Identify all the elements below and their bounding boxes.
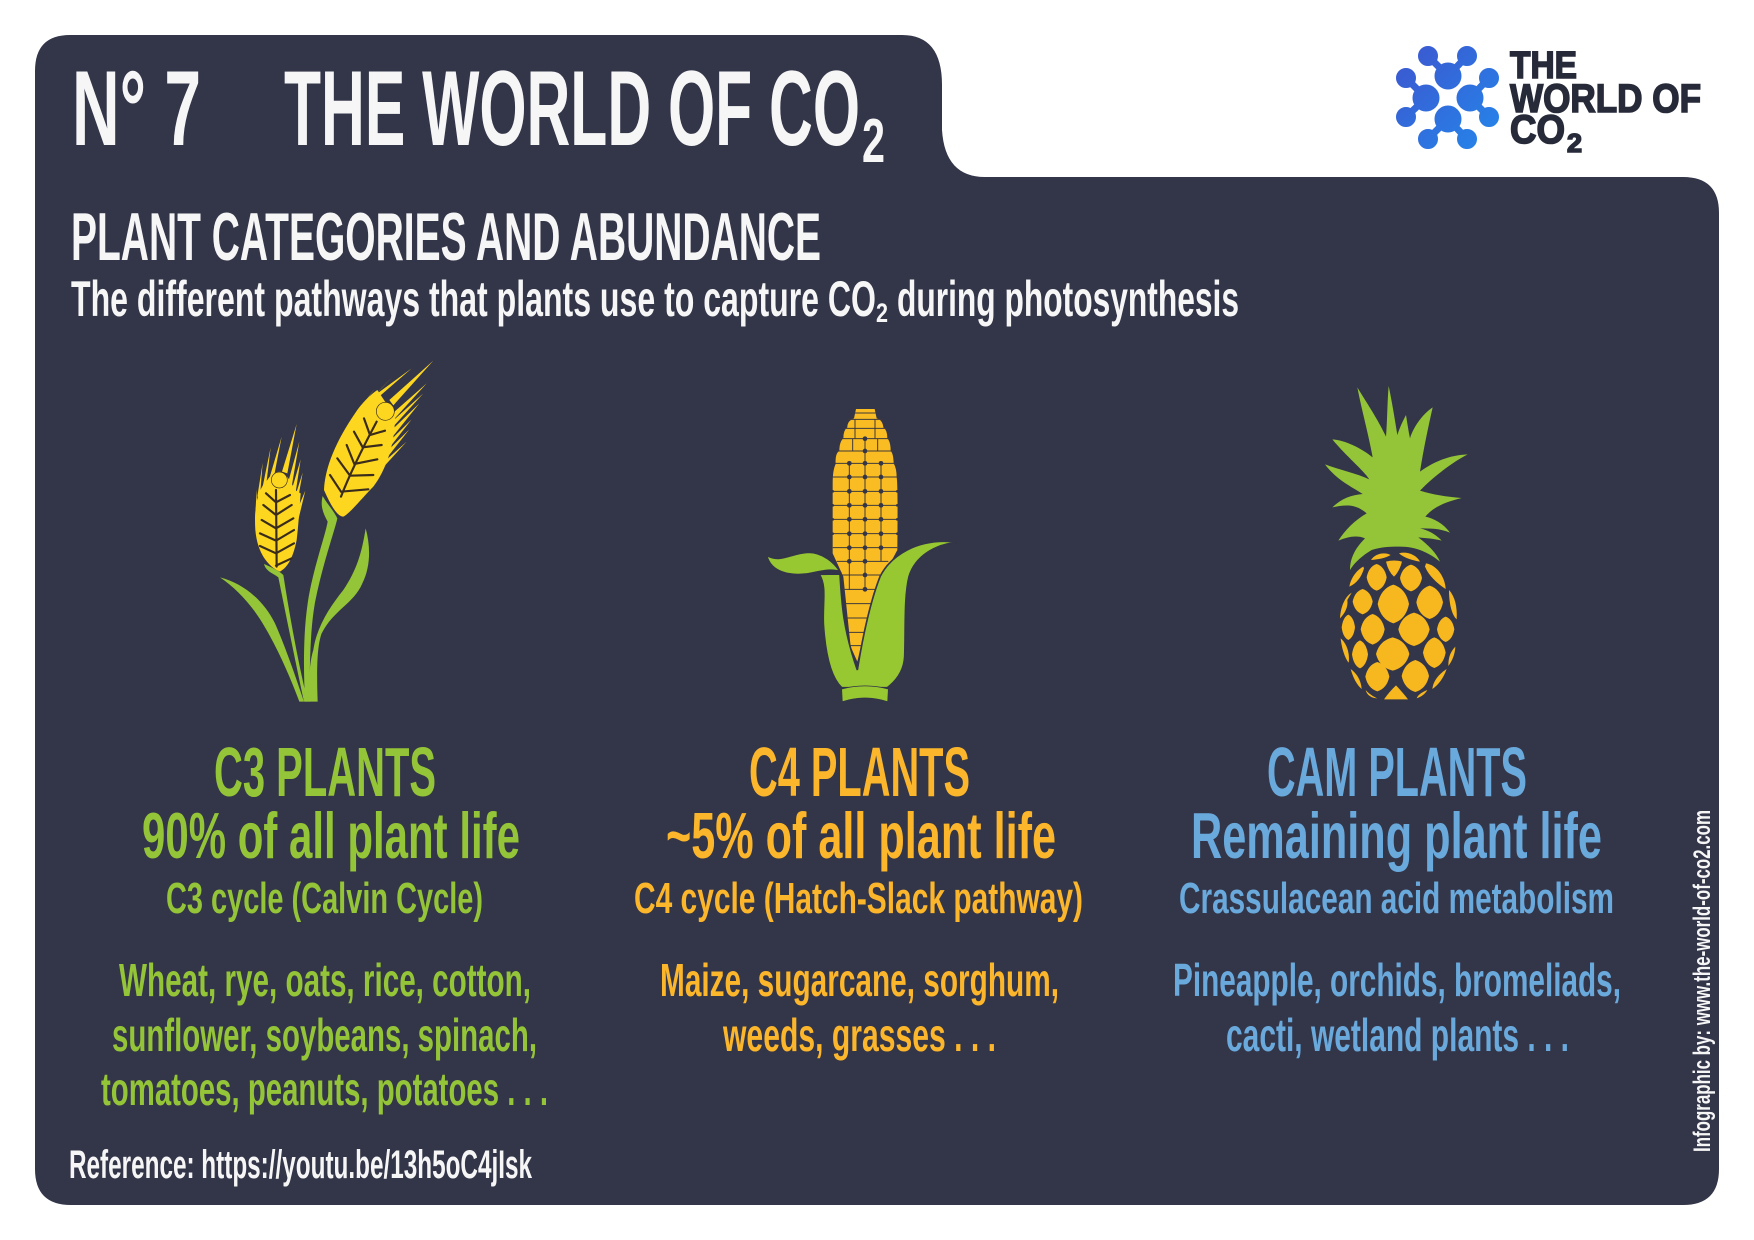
CAM examples: cacti, wetland plants . . .: [1226, 1009, 1569, 1061]
logo wordmark: CO: [1510, 108, 1565, 152]
heading: plant categories: PLANT CATEGORIES AND ABUNDANCE: [71, 199, 821, 275]
C3 examples: Wheat, rye, oats, rice, cotton,: [119, 954, 531, 1006]
title: THE WORLD OF CO: [284, 48, 860, 168]
CAM examples: [1173, 954, 1621, 1061]
icon: wheat: [220, 361, 433, 702]
panel: C3 plants: [101, 361, 548, 1115]
subtitle: 2: [876, 298, 888, 328]
panel: CAM plants: [1173, 386, 1621, 1061]
C3 title: C3 PLANTS: [214, 733, 436, 811]
logo: [1398, 45, 1701, 158]
panel: C4 plants: [634, 409, 1083, 1061]
logo wordmark: WORLD OF: [1510, 77, 1701, 121]
CAM title: CAM PLANTS: [1267, 733, 1527, 811]
logo wordmark: 2: [1567, 128, 1582, 158]
icon: maize cob: [767, 409, 958, 702]
title: N° 7: [72, 48, 201, 168]
C4 examples: weeds, grasses . . .: [722, 1009, 996, 1061]
icon: molecule network: [1398, 48, 1497, 147]
credit: vertical text: Infographic by: www.the-world-of-co2.com: [1689, 810, 1716, 1152]
C4 examples: Maize, sugarcane, sorghum,: [660, 954, 1059, 1006]
icon: pineapple: [1325, 386, 1468, 699]
C4 cycle name: C4 cycle (Hatch-Slack pathway): [634, 874, 1083, 923]
title: 2: [862, 107, 885, 176]
reference link: Reference: https://youtu.be/13h5oC4jIsk: [69, 1143, 532, 1187]
C4 examples: [660, 954, 1059, 1061]
C3 examples: [101, 954, 548, 1115]
subtitle: The different pathways that plants use to capture CO: [71, 271, 876, 327]
logo wordmark: [1510, 45, 1701, 158]
logo wordmark: THE: [1510, 45, 1577, 87]
C4 title: C4 PLANTS: [749, 733, 970, 811]
C3 examples: tomatoes, peanuts, potatoes . . .: [101, 1063, 548, 1115]
C3 abundance: 90% of all plant life: [142, 799, 520, 872]
C3 examples: sunflower, soybeans, spinach,: [112, 1009, 537, 1061]
C4 abundance: ~5% of all plant life: [666, 799, 1056, 872]
C3 cycle name: C3 cycle (Calvin Cycle): [166, 874, 483, 923]
title: [72, 48, 885, 176]
subtitle: during photosynthesis: [897, 271, 1239, 327]
